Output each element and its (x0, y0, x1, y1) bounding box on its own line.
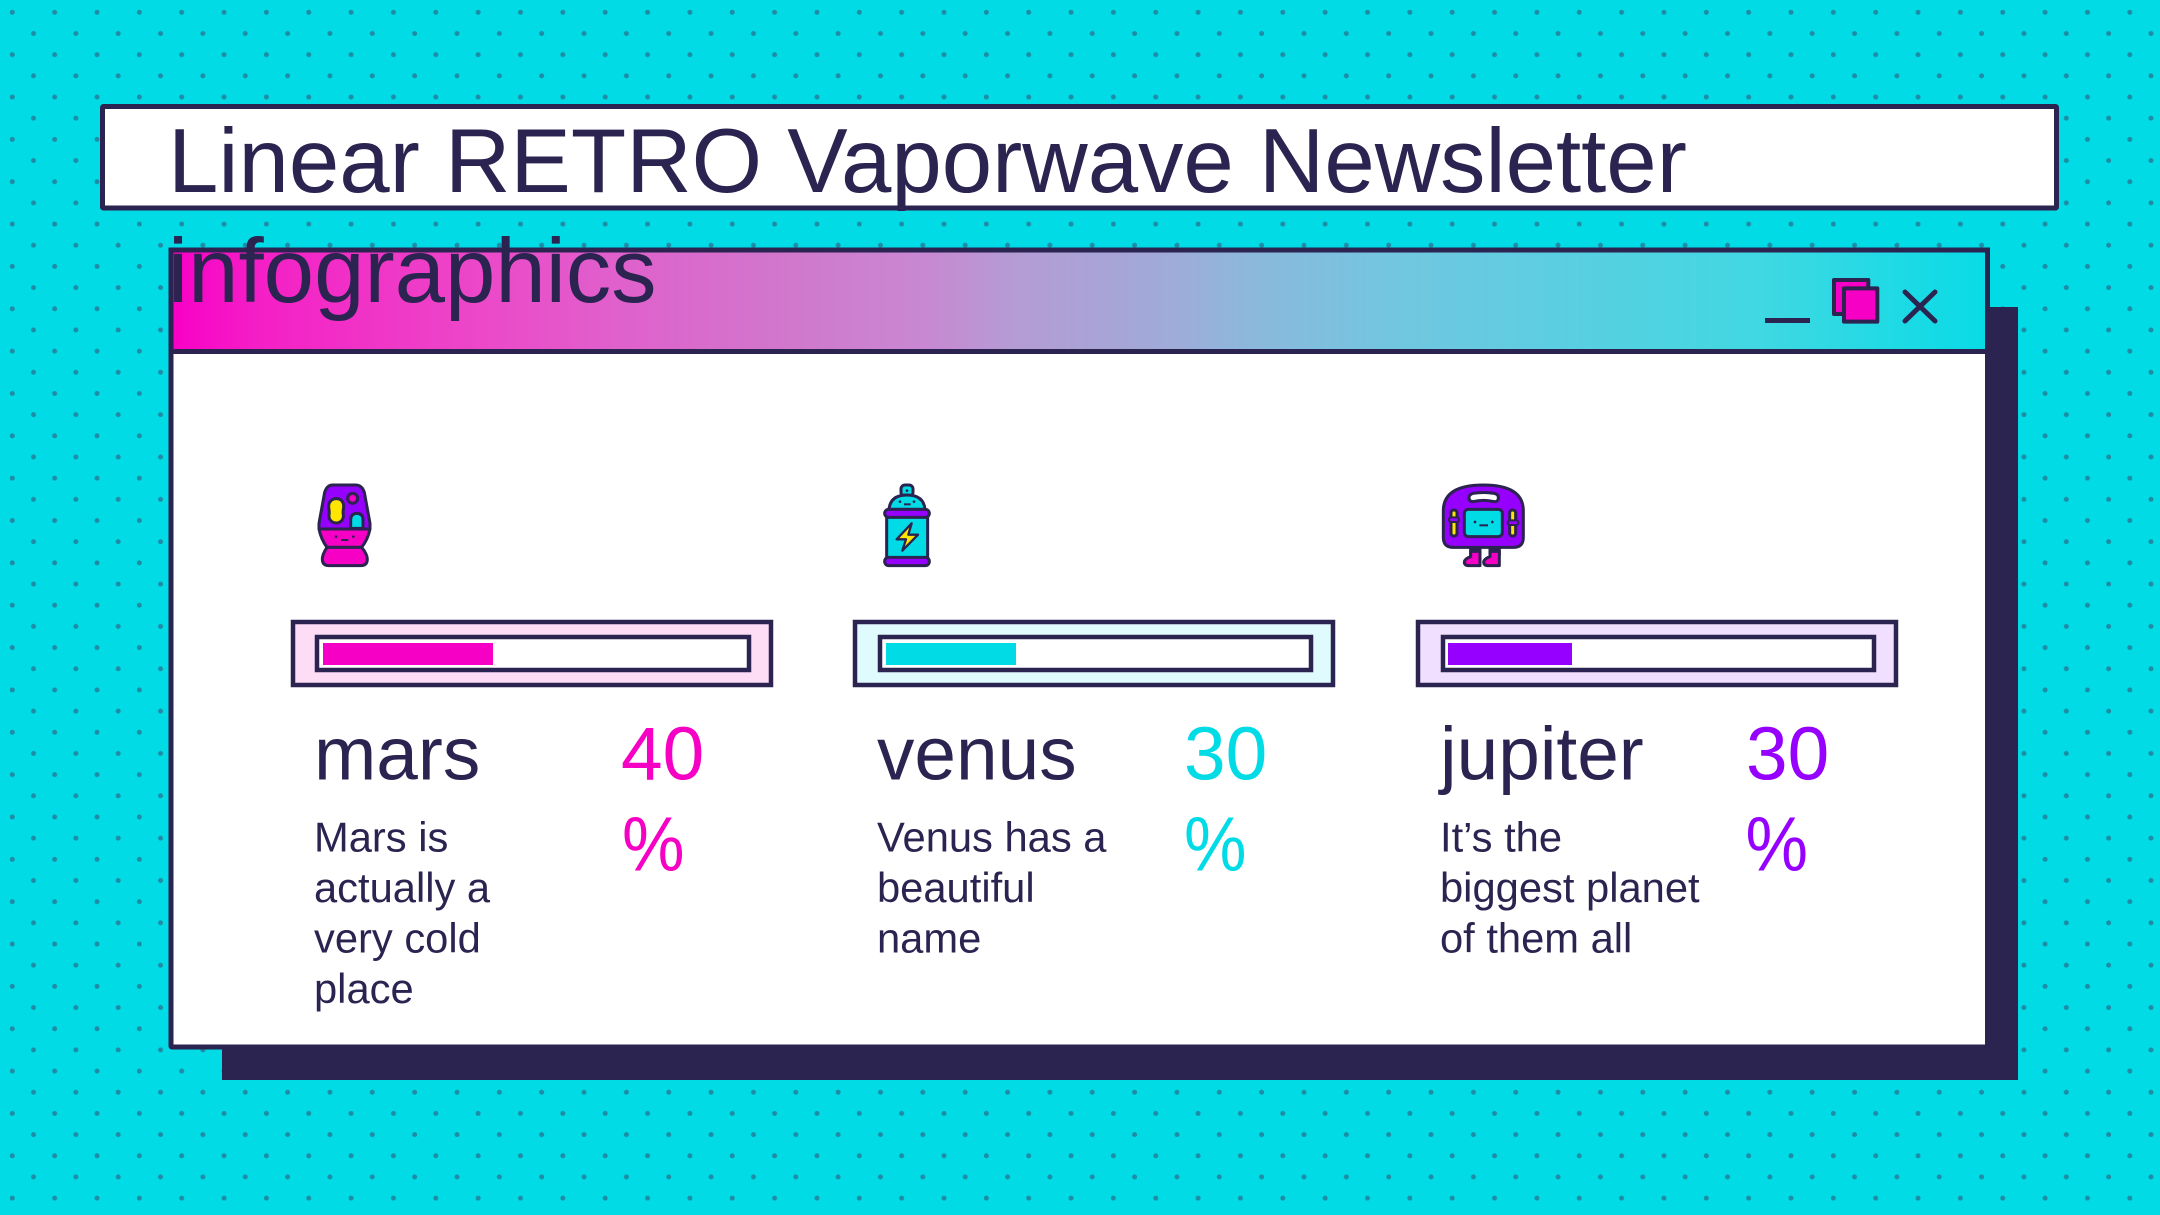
icon: restore (1834, 280, 1877, 322)
window panel (171, 250, 2018, 1080)
window body (171, 250, 1988, 1047)
title: Linear RETRO Vaporwave Newsletter (168, 111, 1687, 212)
value: mars percent: % (622, 801, 685, 887)
value: jupiter percent (1746, 712, 1829, 887)
description: jupiter: It’s the (1440, 814, 1562, 860)
description: venus: beautiful (877, 864, 1035, 911)
icon: close (1905, 292, 1935, 321)
window shadow (222, 307, 2018, 1080)
title (168, 111, 1687, 322)
description: mars: Mars is (314, 814, 448, 860)
icon: spray can (885, 485, 929, 566)
icon: lava lamp (319, 485, 370, 566)
description: mars: very cold (314, 914, 481, 962)
progress bar: mars 40 (293, 622, 771, 685)
label: jupiter: jupiter (1438, 712, 1644, 796)
description: jupiter: of them all (1440, 914, 1632, 962)
label: venus: venus (877, 712, 1077, 796)
description: mars (314, 814, 491, 1012)
value: venus percent: 30 (1184, 712, 1267, 796)
value: jupiter percent: % (1746, 801, 1808, 887)
icon: minimize (1765, 318, 1810, 323)
column: jupiter (1418, 485, 1896, 962)
description: venus: name (877, 914, 981, 962)
column: mars (293, 485, 771, 1012)
progress bar: jupiter 30 (1418, 622, 1896, 685)
window title bar (171, 250, 1988, 352)
description: venus (877, 814, 1107, 962)
label: mars: mars (314, 712, 480, 796)
description: venus: Venus has a (877, 814, 1107, 860)
description: jupiter (1440, 814, 1700, 962)
description: mars: place (314, 965, 414, 1012)
title: infographics (168, 221, 656, 322)
description: mars: actually a (314, 864, 491, 911)
icon: backpack robot (1443, 485, 1523, 566)
progress bar: venus 30 (855, 622, 1333, 685)
column: venus (855, 485, 1333, 962)
description: jupiter: biggest planet (1440, 864, 1700, 911)
value: venus percent (1184, 712, 1267, 887)
value: jupiter percent: 30 (1746, 712, 1829, 796)
value: venus percent: % (1184, 801, 1247, 887)
value: mars percent (621, 712, 704, 887)
value: mars percent: 40 (621, 712, 704, 796)
title box (102, 106, 2056, 208)
